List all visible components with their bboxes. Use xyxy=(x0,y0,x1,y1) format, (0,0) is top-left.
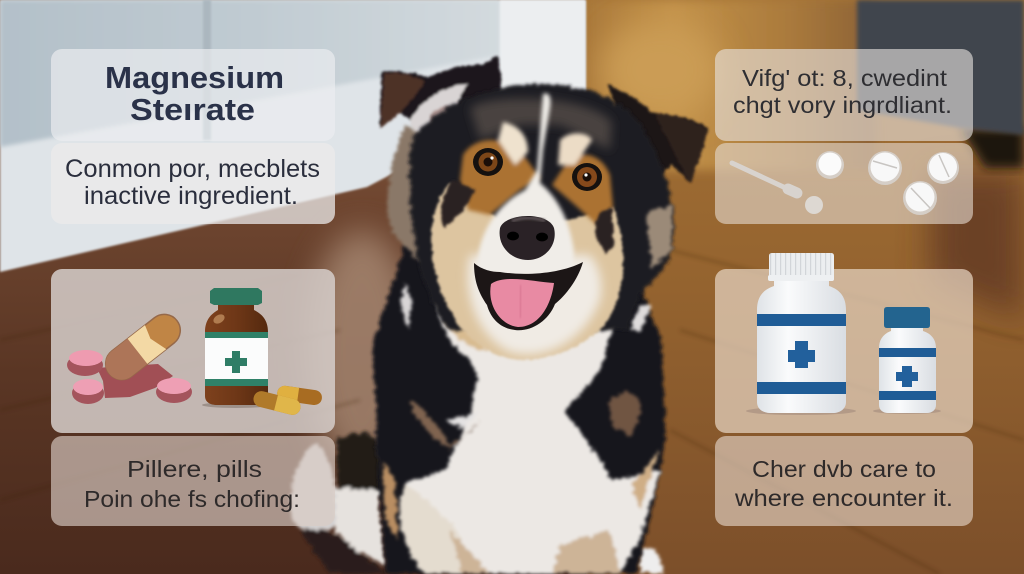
icon: amber medicine bottle xyxy=(202,288,270,408)
text block: Poin ohe fs chofing: xyxy=(84,486,300,512)
text block: where encounter it. xyxy=(734,485,953,511)
dog tail and rear fur xyxy=(290,433,665,574)
mouth xyxy=(474,262,583,330)
heading: Magnesium Stearate xyxy=(105,60,284,127)
icon: capsule pill xyxy=(99,308,187,386)
door xyxy=(0,0,586,272)
text block: inactive ingredient. xyxy=(84,182,298,210)
head dark base xyxy=(410,84,674,330)
icon: yellow capsules xyxy=(252,385,323,417)
dog chest fur xyxy=(382,283,660,574)
icon: dropper stick xyxy=(732,163,823,214)
panel: white bottles xyxy=(715,253,973,433)
heading: Magnesium Stearate: Steırate xyxy=(130,92,255,127)
tongue xyxy=(490,279,554,327)
text block xyxy=(84,456,300,512)
icon: pink tablets xyxy=(67,350,192,404)
panel: title xyxy=(51,49,335,141)
text block xyxy=(733,65,952,118)
text block xyxy=(65,155,320,210)
right eye xyxy=(572,163,602,191)
icon: small white bottle xyxy=(873,307,941,414)
dog body base xyxy=(372,240,666,574)
icon: tablets xyxy=(816,151,959,215)
text block: Pillere, pills xyxy=(127,456,262,482)
black cheek marks xyxy=(441,180,614,254)
tan eye patches xyxy=(460,122,613,225)
text block: Conmon por, mecblets xyxy=(65,155,320,183)
white chin xyxy=(468,255,601,354)
heading: Magnesium Stearate: Magnesium xyxy=(105,60,284,95)
text block: Cher dvb care to xyxy=(752,456,936,482)
white blaze and muzzle xyxy=(478,93,574,302)
text block: Vifg' ot: 8, cwedint xyxy=(742,65,948,91)
text block: chgt vory ingrdliant. xyxy=(733,92,952,118)
panel: white tablets xyxy=(715,143,973,224)
dog photo illustration xyxy=(290,55,708,574)
left eye xyxy=(473,148,503,176)
dog head xyxy=(387,84,674,360)
panel: bottom right caption xyxy=(715,436,973,526)
text block xyxy=(734,456,953,511)
left side fur xyxy=(387,125,450,272)
dog left ear xyxy=(380,55,502,145)
panel: common inactive ingredient text xyxy=(51,143,335,224)
dog right ear xyxy=(607,82,708,183)
icon: large white bottle xyxy=(746,253,856,415)
nose xyxy=(500,216,555,260)
right side grey fur xyxy=(646,205,672,268)
panel: pills caption xyxy=(51,436,335,526)
cream cheeks xyxy=(432,183,623,360)
panel: pills and bottle xyxy=(51,269,335,433)
panel: top right text xyxy=(715,49,973,141)
